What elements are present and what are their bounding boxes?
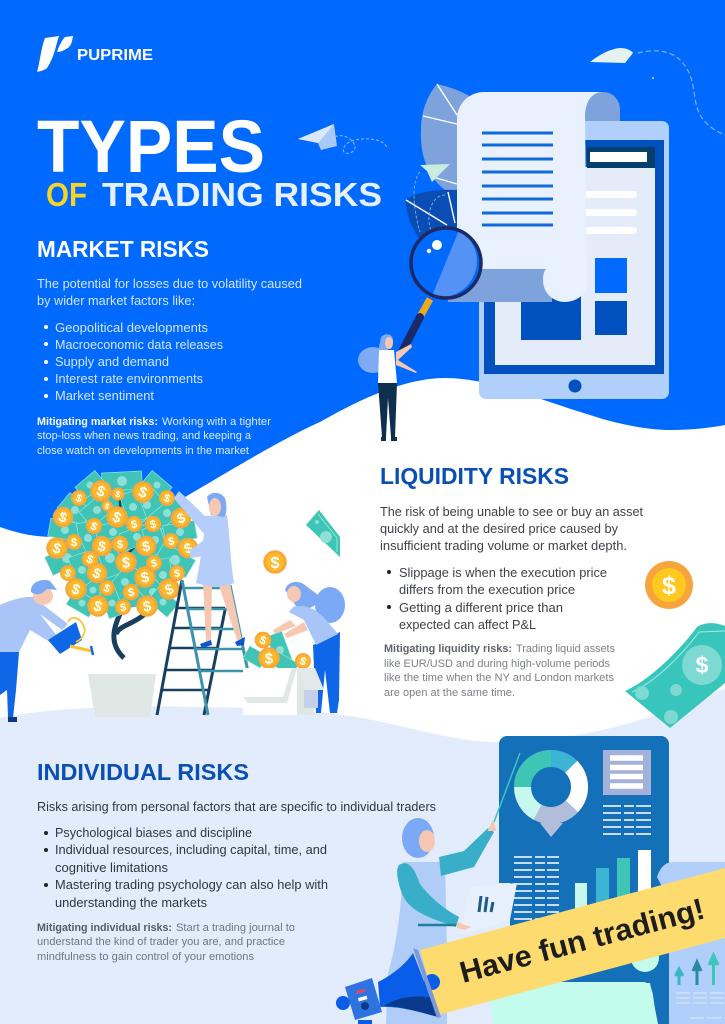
icon: paper plane near title bbox=[298, 124, 387, 153]
document block bbox=[603, 750, 651, 795]
banner: have fun trading: Have fun trading! bbox=[456, 893, 708, 990]
text: individual risks description: Risks arising from personal factors that are specific to individual traders bbox=[37, 799, 436, 814]
tablet home button bbox=[568, 380, 582, 392]
list: market risk factors: Macroeconomic data releases bbox=[55, 337, 223, 352]
tree canopy: $ bbox=[89, 520, 99, 534]
illustration: analytics dashboard bbox=[490, 736, 725, 1024]
tree pot bbox=[88, 674, 156, 717]
list: liquidity risk points: Getting a different price than bbox=[399, 600, 563, 615]
illustration: open box of money: $ bbox=[258, 634, 268, 648]
tree canopy: $ bbox=[136, 484, 149, 502]
heading: liquidity risks: LIQUIDITY RISKS bbox=[380, 463, 569, 489]
illustration: person holding magnifier bbox=[358, 334, 417, 441]
tree canopy: $ bbox=[127, 587, 136, 600]
text: mitigating market risks: close watch on developments in the market bbox=[37, 445, 249, 457]
right side light panel bbox=[657, 862, 725, 1024]
banner: have fun trading bbox=[420, 868, 725, 1015]
mint shape bbox=[490, 982, 657, 1024]
list: liquidity risk points: differs from the execution price bbox=[399, 582, 575, 597]
icon: watering can bbox=[48, 618, 93, 655]
tree canopy: $ bbox=[63, 567, 73, 581]
tree canopy: $ bbox=[175, 509, 188, 527]
text: mitigating individual risks: Start a trading journal to bbox=[176, 922, 295, 934]
icon: falling banknote bbox=[306, 510, 340, 557]
tablet screen bbox=[484, 140, 664, 374]
text: mitigating liquidity risks: like EUR/USD and during high-volume periods bbox=[384, 658, 610, 670]
icon: paper plane top right bbox=[590, 48, 725, 135]
tree canopy: $ bbox=[117, 539, 124, 551]
tree canopy: $ bbox=[91, 598, 104, 616]
title: OF bbox=[46, 176, 87, 213]
list: individual risk factors: understanding the markets bbox=[55, 895, 207, 910]
background: white wave bbox=[0, 378, 725, 1024]
text: mitigating liquidity risks: Mitigating liquidity risks: bbox=[384, 643, 512, 655]
background: light blue bottom wave bbox=[0, 688, 725, 1024]
illustration: money tree bbox=[45, 471, 200, 717]
illustration: presenter bbox=[386, 753, 520, 1024]
tree canopy: $ bbox=[167, 535, 175, 548]
tree canopy: $ bbox=[140, 570, 151, 587]
illustration: open box of money: $ bbox=[298, 655, 308, 669]
text: mitigating market risks bbox=[37, 416, 271, 457]
tree canopy: $ bbox=[69, 581, 82, 599]
list: market risk factors: Supply and demand bbox=[55, 354, 169, 369]
text: mitigating liquidity risks: Trading liquid assets bbox=[516, 643, 615, 655]
list: market risk factors: Market sentiment bbox=[55, 388, 154, 403]
text: market risks description bbox=[37, 276, 302, 308]
pointer stick bbox=[494, 753, 520, 822]
text: liquidity risks description: The risk of being unable to see or buy an asset bbox=[380, 504, 643, 519]
icon: large coin bbox=[645, 561, 693, 609]
white board bbox=[460, 883, 517, 935]
list: liquidity risk points: Slippage is when the execution price bbox=[399, 565, 607, 580]
tree canopy: $ bbox=[122, 555, 130, 571]
list: market risk factors: Interest rate environments bbox=[55, 371, 203, 386]
tree canopy: $ bbox=[150, 557, 158, 570]
text: market risks description: The potential for losses due to volatility caused bbox=[37, 276, 302, 291]
icon: large banknote: $ bbox=[696, 652, 709, 678]
logo bbox=[37, 36, 153, 72]
tree canopy: $ bbox=[74, 492, 84, 506]
tree canopy: $ bbox=[119, 601, 127, 614]
text: mitigating liquidity risks bbox=[384, 643, 615, 699]
text lines bbox=[514, 806, 651, 919]
illustration: woman on ladder bbox=[174, 491, 245, 648]
tree canopy: $ bbox=[141, 537, 151, 555]
list: individual risk factors: Individual resources, including capital, time, and bbox=[55, 842, 327, 857]
tree canopy: $ bbox=[97, 537, 107, 555]
list: liquidity risk points: expected can affect P&L bbox=[399, 617, 536, 632]
title bbox=[37, 105, 382, 213]
icon: megaphone bbox=[336, 948, 441, 1024]
text: mitigating individual risks: Mitigating individual risks: bbox=[37, 922, 172, 934]
heading: market risks: MARKET RISKS bbox=[37, 236, 209, 262]
tree canopy: $ bbox=[85, 553, 95, 567]
list: market risk factors: Geopolitical developments bbox=[55, 320, 208, 335]
tree canopy: $ bbox=[110, 509, 123, 527]
text: liquidity risks description bbox=[380, 504, 643, 553]
tree canopy: $ bbox=[91, 564, 104, 582]
illustration: open box of money: $ bbox=[265, 651, 273, 667]
illustration: man watering tree bbox=[0, 580, 93, 722]
donut chart bbox=[522, 758, 580, 837]
tree canopy: $ bbox=[163, 581, 176, 599]
tree canopy: $ bbox=[114, 489, 122, 500]
illustration: woman collecting money bbox=[273, 582, 345, 713]
list: individual risk factors: cognitive limitations bbox=[55, 860, 168, 875]
list: individual risk factors: Mastering trading psychology can also help with bbox=[55, 877, 328, 892]
tree canopy: $ bbox=[57, 508, 70, 526]
tree canopy: $ bbox=[182, 539, 195, 557]
icon: large banknote bbox=[625, 623, 725, 728]
text: liquidity risks description: quickly and at the desired price caused by bbox=[380, 521, 618, 536]
tree canopy: $ bbox=[103, 501, 111, 511]
icon: falling coin: $ bbox=[271, 554, 280, 572]
tree canopy: $ bbox=[50, 540, 63, 558]
title: TRADING RISKS bbox=[102, 176, 382, 213]
text: market risks description: by wider market factors like: bbox=[37, 293, 195, 308]
illustration: ladder bbox=[157, 580, 257, 715]
list: individual risk factors: Psychological biases and discipline bbox=[55, 825, 252, 840]
tree trunk bbox=[114, 612, 145, 658]
illustration: paper scroll bbox=[448, 92, 620, 302]
heading: individual risks: INDIVIDUAL RISKS bbox=[37, 759, 249, 785]
tree canopy: $ bbox=[102, 582, 112, 596]
tree canopy: $ bbox=[142, 599, 153, 616]
text: mitigating individual risks: understand the kind of trader you are, and practice bbox=[37, 936, 285, 948]
list: market risk factors bbox=[44, 320, 223, 403]
tree canopy: $ bbox=[71, 537, 77, 549]
icon: magnifying glass bbox=[403, 227, 482, 350]
text: mitigating individual risks bbox=[37, 922, 295, 963]
text: mitigating liquidity risks: like the time when the NY and London markets bbox=[384, 672, 614, 684]
illustration: tablet with report bbox=[479, 121, 669, 399]
text: mitigating individual risks: mindfulness to gain control of your emotions bbox=[37, 951, 254, 963]
dashboard panel bbox=[499, 736, 669, 1024]
text: mitigating market risks: stop-loss when news trading, and keeping a bbox=[37, 430, 251, 442]
text: mitigating liquidity risks: are open at the same time. bbox=[384, 687, 515, 699]
list: liquidity risk points bbox=[387, 565, 607, 632]
tree canopy: $ bbox=[162, 492, 172, 506]
icon: falling coin bbox=[265, 552, 285, 572]
text: mitigating market risks: Mitigating market risks: bbox=[37, 416, 158, 428]
tree canopy: $ bbox=[173, 567, 181, 580]
text: liquidity risks description: insufficient trading volume or market depth. bbox=[380, 538, 627, 553]
tablet body bbox=[479, 121, 669, 399]
logo: PUPRIME bbox=[77, 47, 153, 64]
tree canopy: $ bbox=[149, 518, 158, 531]
illustration: open box of money bbox=[243, 631, 324, 715]
bar chart bbox=[575, 850, 651, 913]
tree canopy: $ bbox=[130, 518, 139, 531]
title: TYPES bbox=[37, 105, 265, 188]
tree canopy: $ bbox=[94, 483, 107, 501]
tree canopy bbox=[45, 471, 200, 619]
list: individual risk factors bbox=[44, 825, 328, 910]
illustration: leaves bbox=[406, 84, 475, 250]
icon: large coin: $ bbox=[662, 572, 676, 600]
text: mitigating market risks: Working with a tighter bbox=[162, 416, 271, 428]
